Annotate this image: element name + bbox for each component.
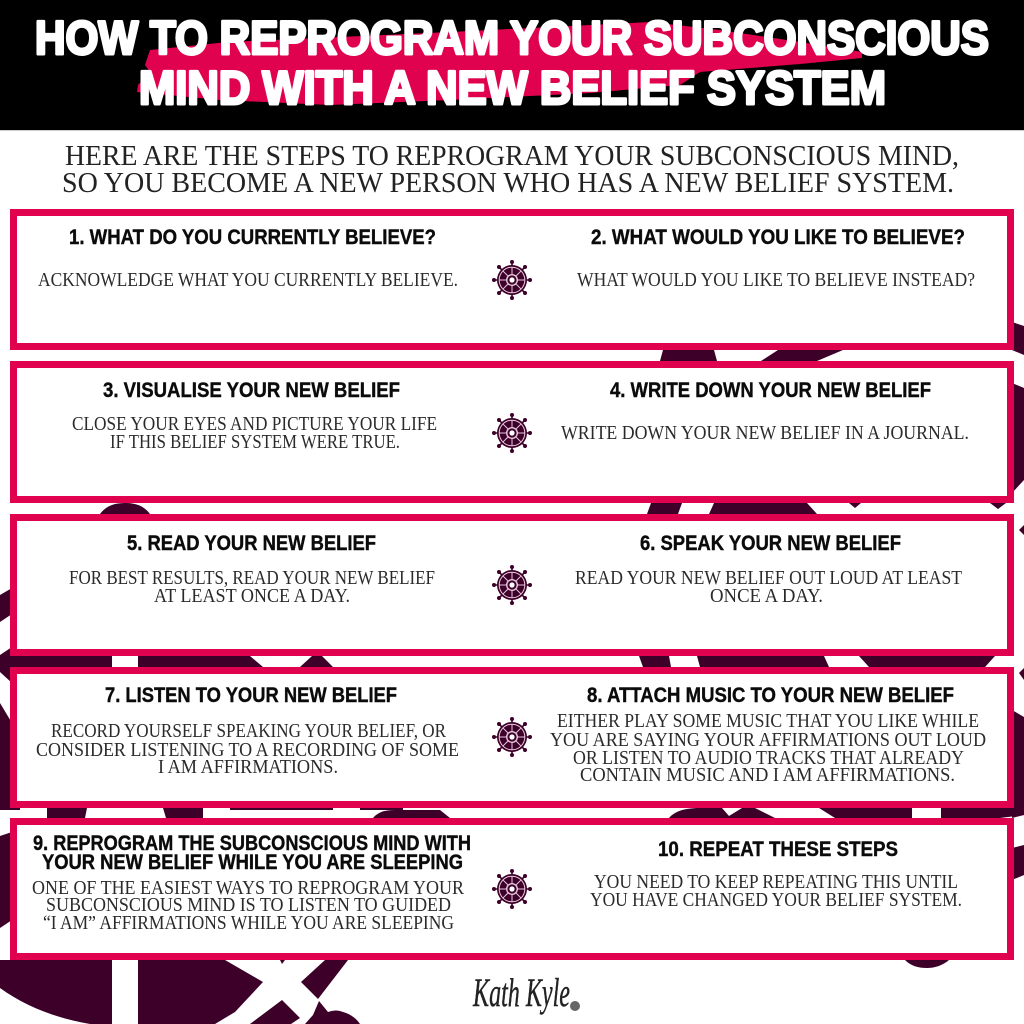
step 6 text: ONCE A DAY. (710, 585, 823, 607)
step 10 text: YOU HAVE CHANGED YOUR BELIEF SYSTEM. (590, 889, 962, 911)
step 10 heading: 10. REPEAT THESE STEPS (658, 838, 898, 861)
step 6 text (575, 567, 962, 607)
icon: ship wheel (492, 717, 532, 757)
step 7 text (36, 720, 459, 778)
subtitle (62, 141, 959, 199)
step 1 heading: 1. WHAT DO YOU CURRENTLY BELIEVE? (69, 226, 436, 249)
step 7 text: RECORD YOURSELF SPEAKING YOUR BELIEF, OR (51, 720, 447, 742)
step 10 text: YOU NEED TO KEEP REPEATING THIS UNTIL (594, 871, 958, 893)
step 9 heading: 9. REPROGRAM THE SUBCONSCIOUS MIND WITH (33, 832, 471, 855)
step 7 text: I AM AFFIRMATIONS. (158, 756, 338, 778)
panel: steps 1 and 2 (14, 212, 1010, 346)
step 8 text: EITHER PLAY SOME MUSIC THAT YOU LIKE WHILE (557, 710, 979, 732)
subtitle: SO YOU BECOME A NEW PERSON WHO HAS A NEW BELIEF SYSTEM. (62, 168, 954, 199)
step 5 text (69, 567, 435, 607)
step 3 text (72, 413, 437, 453)
step 10 text (590, 871, 962, 911)
icon: ship wheel (492, 869, 532, 909)
step 9 text: ONE OF THE EASIEST WAYS TO REPROGRAM YOUR (32, 877, 465, 899)
panel: steps 5 and 6 (14, 518, 1010, 652)
step 6 heading: 6. SPEAK YOUR NEW BELIEF (640, 532, 901, 555)
step 8 text (550, 710, 986, 786)
step 3 text: IF THIS BELIEF SYSTEM WERE TRUE. (110, 431, 400, 453)
step 3 heading: 3. VISUALISE YOUR NEW BELIEF (103, 379, 400, 402)
background pattern (0, 322, 1024, 1024)
title: MIND WITH A NEW BELIEF SYSTEM (139, 61, 886, 114)
signature logo: Kath Kyle (472, 970, 570, 1015)
step 7 heading: 7. LISTEN TO YOUR NEW BELIEF (105, 684, 397, 707)
step 7 text: CONSIDER LISTENING TO A RECORDING OF SOME (36, 739, 459, 761)
step 9 text (32, 877, 465, 934)
step 4 text: WRITE DOWN YOUR NEW BELIEF IN A JOURNAL. (561, 422, 969, 444)
step 8 text: YOU ARE SAYING YOUR AFFIRMATIONS OUT LOUD (550, 729, 986, 751)
step 2 text: WHAT WOULD YOU LIKE TO BELIEVE INSTEAD? (577, 269, 975, 291)
header band (0, 0, 1024, 131)
step 9 text: “I AM” AFFIRMATIONS WHILE YOU ARE SLEEPING (43, 912, 454, 934)
signature logo (472, 970, 580, 1015)
panel: steps 9 and 10 (14, 822, 1010, 956)
subtitle: HERE ARE THE STEPS TO REPROGRAM YOUR SUBCONSCIOUS MIND, (65, 141, 959, 172)
step 1 text: ACKNOWLEDGE WHAT YOU CURRENTLY BELIEVE. (38, 269, 458, 291)
step 5 text: AT LEAST ONCE A DAY. (154, 585, 350, 607)
step 4 heading: 4. WRITE DOWN YOUR NEW BELIEF (610, 379, 931, 402)
step 3 text: CLOSE YOUR EYES AND PICTURE YOUR LIFE (72, 413, 437, 435)
step 8 heading: 8. ATTACH MUSIC TO YOUR NEW BELIEF (587, 684, 954, 707)
step 9 heading: YOUR NEW BELIEF WHILE YOU ARE SLEEPING (42, 851, 463, 874)
panel: steps 3 and 4 (14, 364, 1010, 500)
step 9 text: SUBCONSCIOUS MIND IS TO LISTEN TO GUIDED (46, 894, 451, 916)
step 5 heading: 5. READ YOUR NEW BELIEF (127, 532, 376, 555)
step 2 heading: 2. WHAT WOULD YOU LIKE TO BELIEVE? (591, 226, 965, 249)
step 9 heading (33, 832, 471, 874)
step 6 text: READ YOUR NEW BELIEF OUT LOUD AT LEAST (575, 567, 962, 589)
icon: ship wheel (492, 413, 532, 453)
step 8 text: CONTAIN MUSIC AND I AM AFFIRMATIONS. (580, 764, 955, 786)
title (35, 11, 989, 114)
panel: steps 7 and 8 (14, 670, 1010, 804)
icon: ship wheel (492, 260, 532, 300)
step 5 text: FOR BEST RESULTS, READ YOUR NEW BELIEF (69, 567, 435, 589)
step 8 text: OR LISTEN TO AUDIO TRACKS THAT ALREADY (573, 747, 964, 769)
icon: ship wheel (492, 565, 532, 605)
brush stroke (137, 22, 862, 105)
